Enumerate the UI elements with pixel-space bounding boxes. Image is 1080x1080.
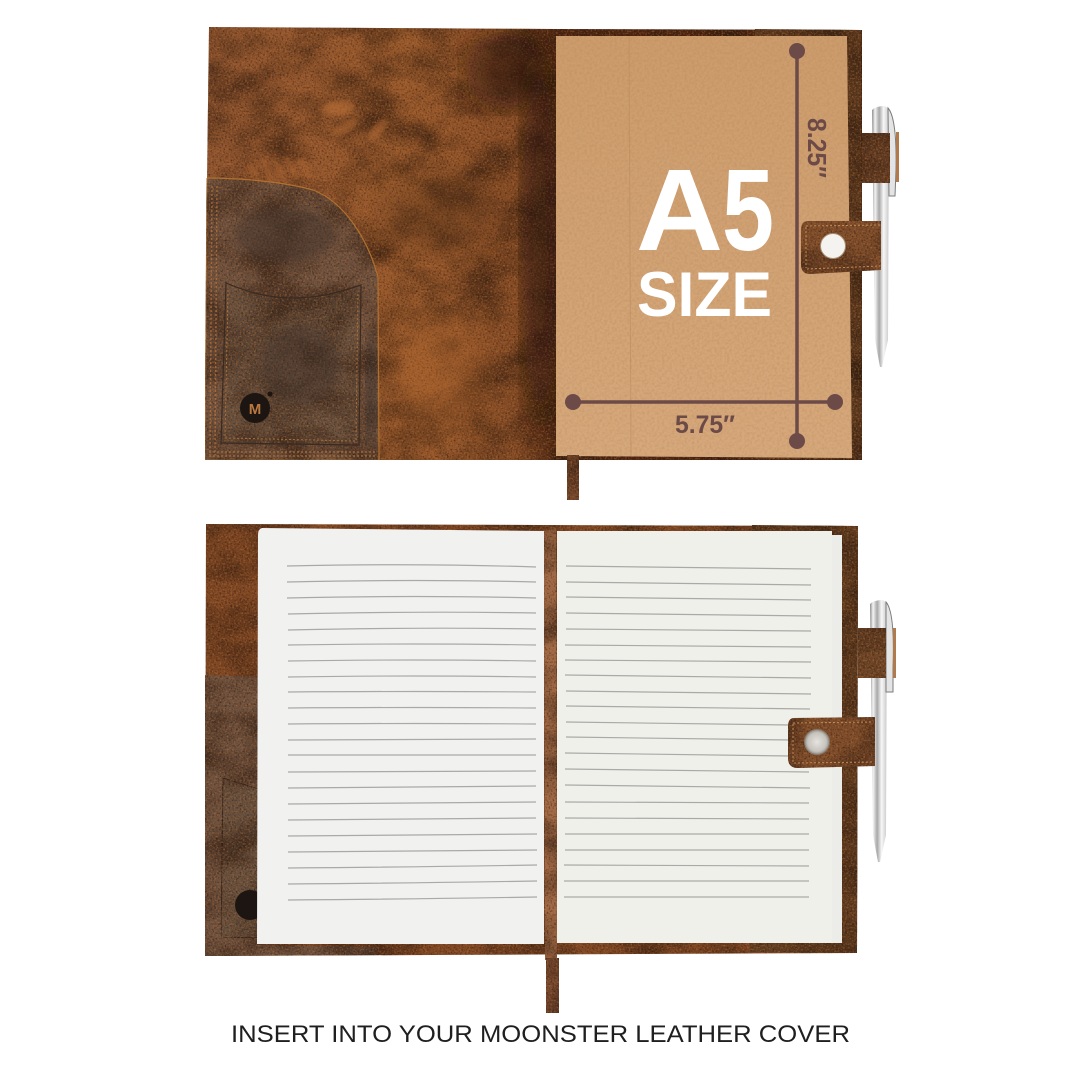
pen loop [858, 628, 896, 678]
clasp strap [801, 221, 881, 274]
right page rules [564, 566, 811, 897]
size dimension: width 5.75 [565, 394, 843, 439]
heading: SIZE: SIZE [637, 260, 772, 330]
icon: Moonster logo: M [249, 401, 261, 418]
icon: Moonster logo [240, 391, 273, 423]
center bookmark ribbon [544, 528, 559, 1013]
right page [557, 531, 832, 943]
pen [870, 600, 893, 862]
right cover edge [556, 29, 862, 460]
snap button [820, 234, 846, 258]
pocket visible on left [205, 675, 377, 956]
size dimension: height 8.25: 8.25″ [802, 118, 832, 178]
pen loop [862, 132, 899, 183]
left page rules [287, 565, 537, 900]
right flap leather [750, 525, 858, 953]
bookmark ribbon [567, 455, 579, 500]
panel: leather cover with lined notebook [205, 524, 896, 1013]
size dimension: height 8.25 [789, 43, 832, 449]
left page [257, 528, 544, 944]
inner card pocket [221, 283, 361, 445]
heading: A5 [636, 145, 774, 275]
pocket: curved leather pocket [205, 178, 379, 460]
snap button [804, 730, 830, 754]
left leather cover panel [205, 27, 558, 460]
right flap strip [755, 29, 862, 459]
panel: open leather cover with A5 kraft notebook [205, 27, 899, 500]
heading: A5: 5 [722, 145, 774, 275]
caption: INSERT INTO YOUR MOONSTER LEATHER COVER [231, 1021, 850, 1048]
leather cover [205, 524, 858, 956]
size dimension: width 5.75: 5.75″ [675, 411, 735, 439]
heading: A5: A [636, 145, 723, 275]
kraft notebook cover [556, 36, 852, 458]
clasp strap [788, 717, 875, 768]
pen [872, 106, 896, 367]
right page stack edge [830, 535, 842, 943]
